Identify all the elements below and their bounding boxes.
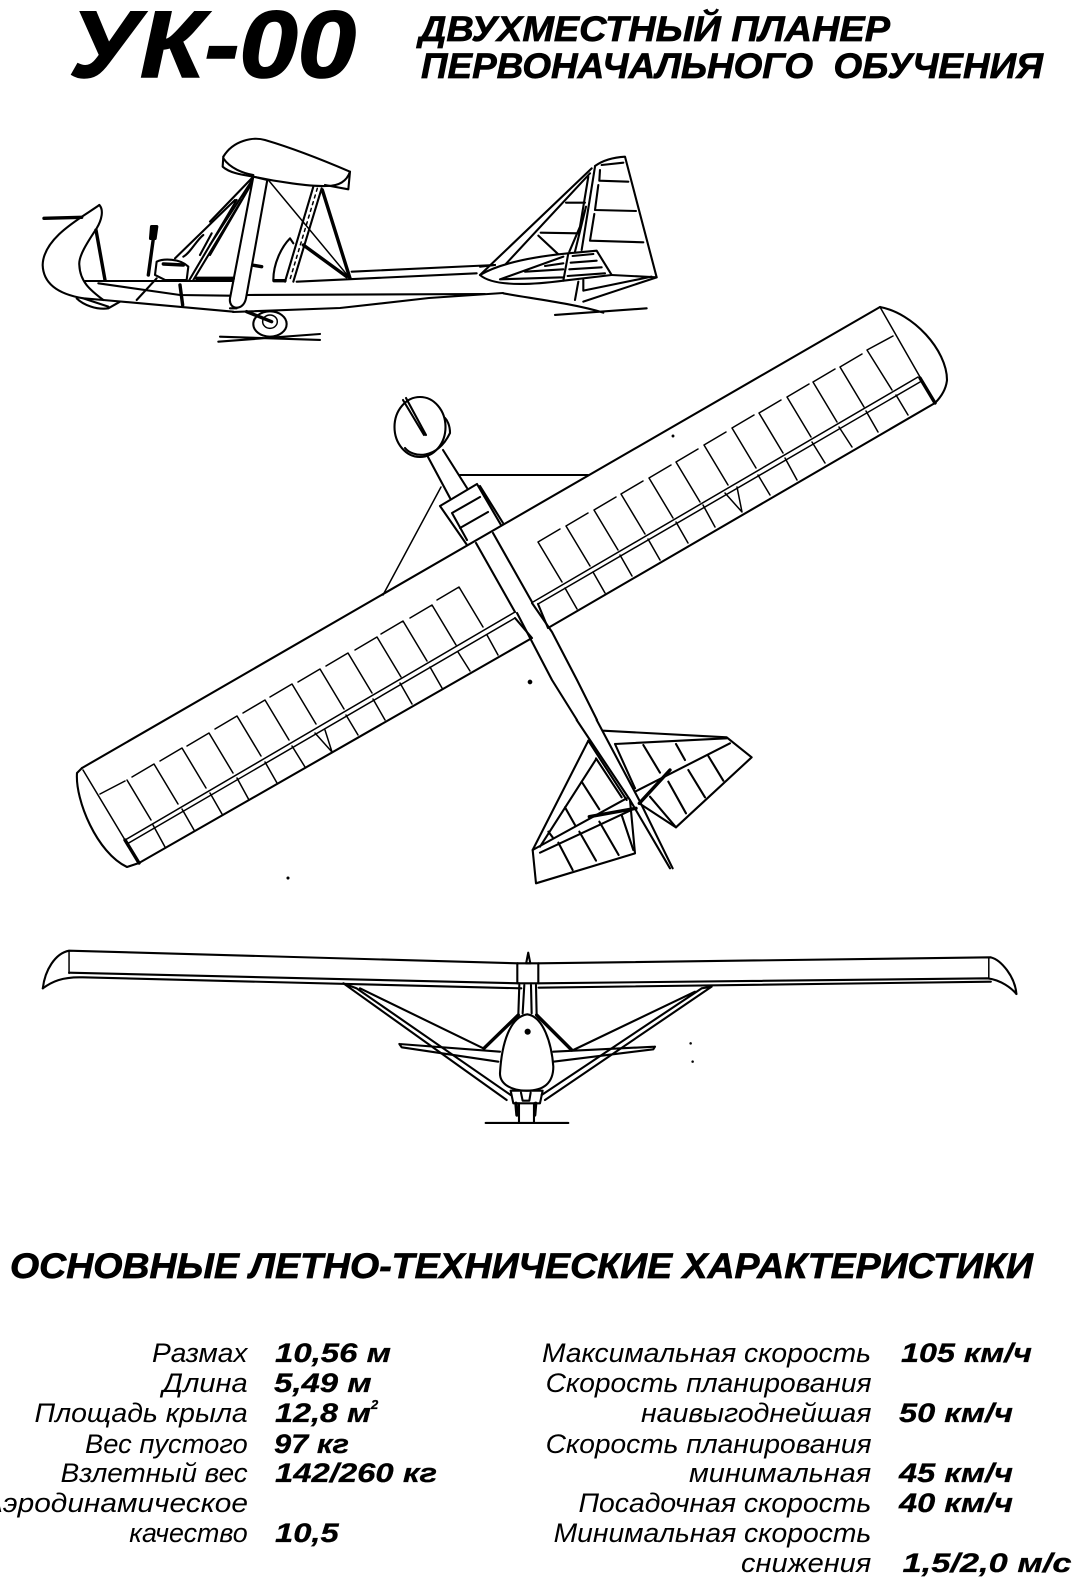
top view: tail <box>533 720 752 883</box>
specifications: right column: 45 км/ч <box>898 1458 1013 1488</box>
front view: wing <box>43 951 1016 994</box>
subtitle: ПЕРВОНАЧАЛЬНОГО ОБУЧЕНИЯ <box>421 47 1045 86</box>
top view: left wing ribs <box>100 587 483 820</box>
top view drawing <box>77 307 947 883</box>
specifications: right column <box>542 1338 1072 1578</box>
specifications: left column <box>0 1338 437 1548</box>
top view: right wing ribs <box>538 336 893 582</box>
specifications: right column: наивыгоднейшая <box>641 1398 871 1428</box>
specifications: left column: 10,56 м <box>275 1338 391 1368</box>
specifications: right column: 50 км/ч <box>899 1398 1013 1428</box>
specifications: left column: Площадь крыла <box>34 1398 248 1428</box>
specifications: right column: 40 км/ч <box>898 1488 1013 1518</box>
side view: tail <box>480 157 657 315</box>
side view: wing and struts <box>210 139 495 308</box>
specifications: right column: 1,5/2,0 м/с <box>902 1548 1072 1578</box>
subtitle <box>416 8 1045 86</box>
specifications: right column: Минимальная скорость <box>554 1518 871 1548</box>
specifications: left column: 2 <box>370 1397 379 1412</box>
specifications: right column: Скорость планирования <box>546 1368 872 1398</box>
specifications: left column: качество <box>129 1518 248 1548</box>
specifications: right column: Скорость планирования <box>546 1429 872 1459</box>
specifications: left column: Вес пустого <box>85 1429 248 1459</box>
specifications: left column: Длина <box>159 1368 248 1398</box>
specifications: right column: снижения <box>741 1548 871 1578</box>
specifications: left column: 142/260 кг <box>275 1458 437 1488</box>
specifications: right column: минимальная <box>689 1458 871 1488</box>
front view drawing <box>43 951 1016 1123</box>
top view: fuselage <box>287 397 674 879</box>
side view: nose, cockpit and wheel <box>43 200 320 342</box>
specifications: left column: 5,49 м <box>274 1368 372 1398</box>
specifications: left column: 10,5 <box>275 1518 340 1548</box>
specifications: right column: 105 км/ч <box>901 1338 1032 1368</box>
specifications: right column: Максимальная скорость <box>542 1338 871 1368</box>
specifications: left column: 97 кг <box>274 1429 349 1459</box>
side view: fuselage lines <box>233 293 503 312</box>
specifications: right column: Посадочная скорость <box>578 1488 871 1518</box>
side view drawing <box>43 139 657 342</box>
specifications: left column: Взлетный вес <box>61 1458 248 1488</box>
top view: wing outline <box>77 307 947 867</box>
specifications heading: ОСНОВНЫЕ ЛЕТНО-ТЕХНИЧЕСКИЕ ХАРАКТЕРИСТИКИ <box>10 1247 1034 1286</box>
specifications: left column: Размах <box>152 1338 249 1368</box>
front view: fuselage, struts and wheel <box>343 963 712 1123</box>
subtitle: ДВУХМЕСТНЫЙ ПЛАНЕР <box>416 8 891 49</box>
specifications: left column: 12,8 м <box>275 1398 371 1428</box>
